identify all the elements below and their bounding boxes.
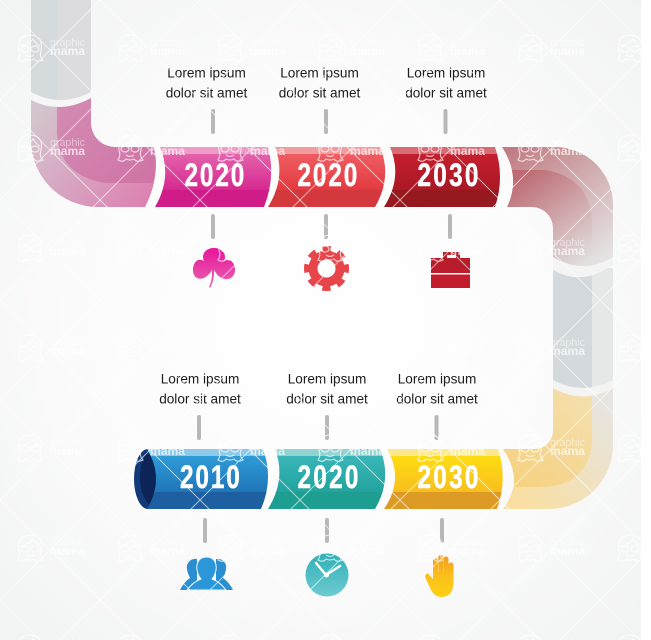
text block: bottom 3: Lorem ipsum bbox=[398, 372, 476, 386]
year: dark red: 2030 bbox=[418, 158, 481, 194]
icon: clock bbox=[306, 554, 348, 596]
segment: pink 2020 bbox=[155, 147, 272, 207]
year: yellow: 2030 bbox=[418, 460, 481, 496]
segment: teal 2020 bbox=[268, 449, 386, 509]
text block: bottom 3: dolor sit amet bbox=[396, 392, 478, 406]
pipe ring bbox=[31, 92, 91, 107]
text block: top 2: Lorem ipsum bbox=[280, 66, 359, 80]
icon: briefcase bbox=[431, 252, 470, 288]
year: blue: 2010 bbox=[180, 460, 242, 496]
connector lines bbox=[199, 111, 450, 541]
text block: top 3: dolor sit amet bbox=[405, 86, 487, 100]
icon: people bbox=[180, 557, 233, 590]
icon: clover bbox=[193, 248, 235, 288]
text block: top 2: dolor sit amet bbox=[279, 86, 361, 100]
year: pink: 2020 bbox=[184, 158, 246, 194]
panel: faded red pipe bend bbox=[502, 147, 613, 274]
pipe end: blue open end bbox=[134, 449, 162, 509]
panel: faded pink pipe bend bbox=[31, 92, 156, 207]
year: red: 2020 bbox=[298, 158, 359, 194]
segment: blue 2010 bbox=[140, 449, 275, 509]
icon: hand bbox=[425, 558, 454, 597]
text block: bottom 2: Lorem ipsum bbox=[288, 372, 366, 386]
text block: bottom 2: dolor sit amet bbox=[286, 392, 368, 406]
panel: faded grey top-left pipe bbox=[31, 0, 91, 100]
panel: faded yellow pipe bend bbox=[503, 380, 613, 509]
text block: bottom 1: Lorem ipsum bbox=[161, 372, 239, 386]
year: teal: 2020 bbox=[298, 460, 361, 496]
pipe ring lower bbox=[553, 380, 613, 396]
pipe ring upper bbox=[553, 257, 613, 277]
text block: top 1: Lorem ipsum bbox=[167, 66, 246, 80]
text block: top 3: Lorem ipsum bbox=[407, 66, 485, 80]
right margin bbox=[641, 0, 651, 640]
segment: yellow 2030 bbox=[384, 449, 503, 509]
text block: top 1: dolor sit amet bbox=[166, 86, 248, 100]
icon: gear bbox=[303, 245, 350, 292]
segment: dark red 2030 bbox=[384, 147, 500, 207]
segment: red 2020 bbox=[268, 147, 386, 207]
panel: grey right vertical pipe bbox=[553, 257, 613, 390]
text block: bottom 1: dolor sit amet bbox=[159, 392, 241, 406]
